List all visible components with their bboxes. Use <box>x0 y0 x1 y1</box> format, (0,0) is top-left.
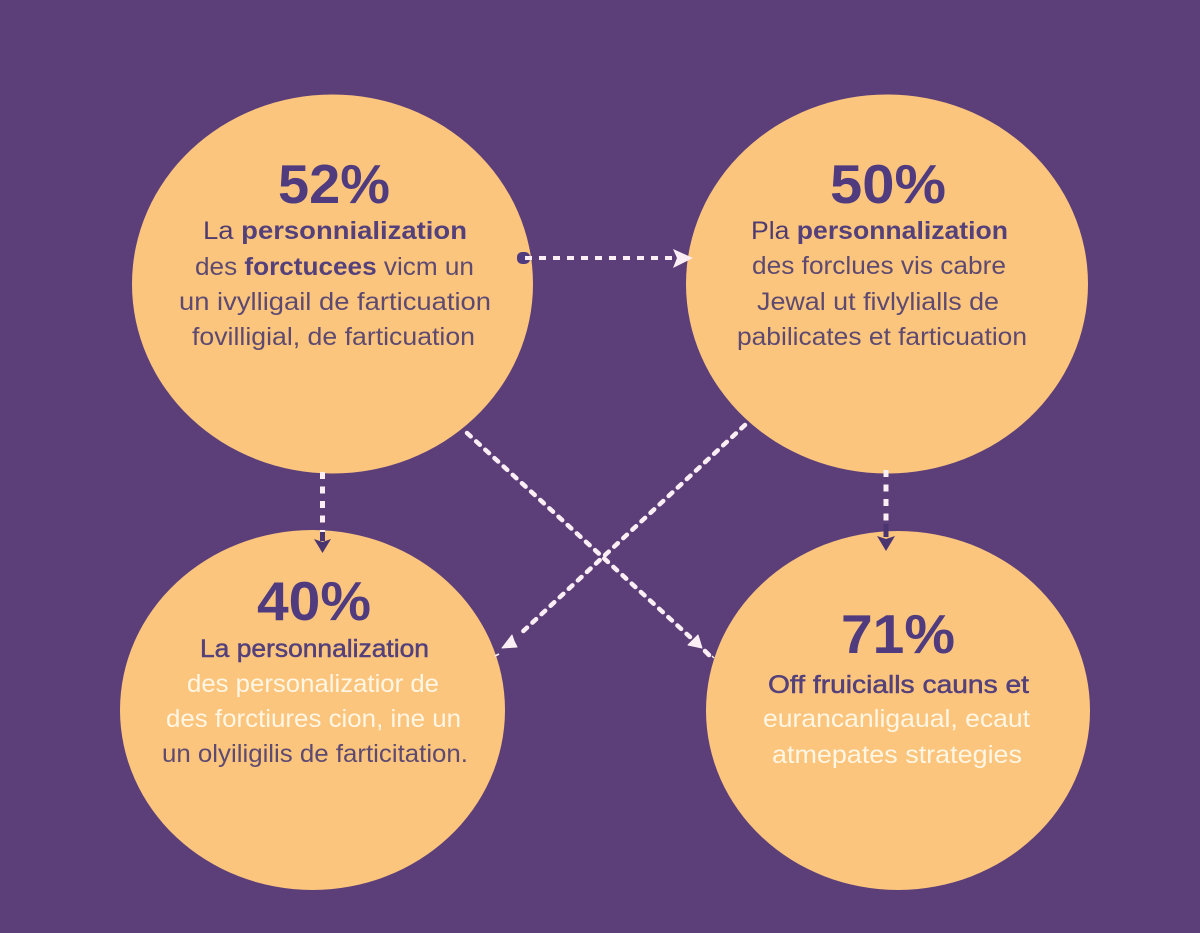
arrow: 52% to 50% <box>517 249 693 268</box>
text block: 71% description: eurancanligaual, ecaut <box>763 705 1030 733</box>
panel: 71% circle <box>706 531 1090 890</box>
text block: 40% description: un olyiligilis de farticitation. <box>162 740 468 768</box>
stat: 52%: 52% <box>278 153 390 215</box>
text block: 50% description <box>737 217 1027 351</box>
arrow: 50% to 71% <box>877 470 895 551</box>
text block: 50% description: Pla personnalization <box>751 217 1008 245</box>
text block: 50% description: des forclues vis cabre <box>752 252 1006 280</box>
text block: 71% description: atmepates strategies <box>772 741 1022 769</box>
text block: 52% description: fovilligial, de farticuation <box>192 323 475 351</box>
text block: 50% description: pabilicates et farticuation <box>737 323 1027 351</box>
panel: 50% circle <box>686 94 1088 474</box>
stat: 50%: 50% <box>830 153 946 215</box>
arrow: 52% to 40% <box>314 472 331 553</box>
text block: 40% description: La personnalization <box>200 635 429 663</box>
text block: 52% description <box>179 217 491 351</box>
text block: 40% description: des forctiures cion, ine un <box>166 705 461 733</box>
text block: 50% description: Jewal ut fivlylialls de <box>757 288 999 316</box>
text block: 52% description: des forctucees vicm un <box>195 253 474 281</box>
stat: 71%: 71% <box>841 603 955 665</box>
text block: 40% description: des personalizatior de <box>187 670 439 698</box>
arrow: 50% to 40% diagonal <box>495 425 745 656</box>
text block: 71% description <box>763 671 1030 769</box>
panel: 40% circle <box>120 530 505 890</box>
text block: 52% description: un ivylligail de farticuation <box>179 288 491 316</box>
text block: 71% description: Off fruicialls cauns et <box>768 671 1029 699</box>
arrow: 52% to 71% diagonal <box>467 433 714 658</box>
stat: 40%: 40% <box>257 570 371 632</box>
text block: 52% description: La personnialization <box>203 217 467 245</box>
text block: 40% description <box>162 635 468 768</box>
panel: 52% circle <box>132 94 533 474</box>
